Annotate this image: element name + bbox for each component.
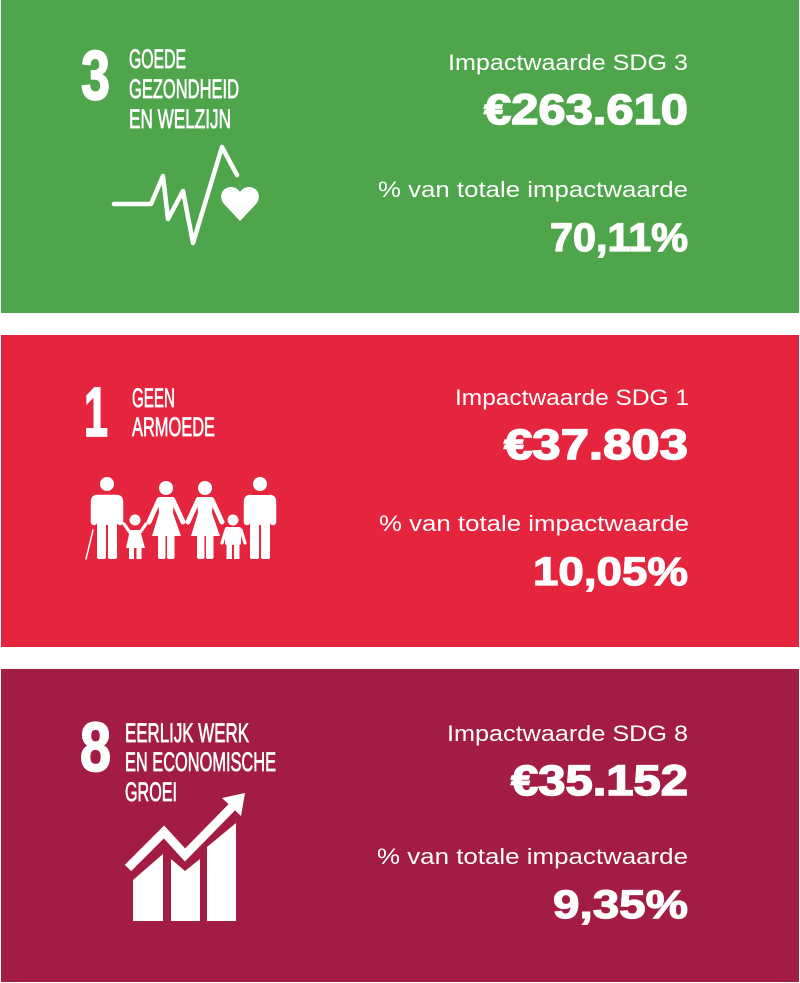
SDG 3 title — [129, 44, 239, 134]
child girl — [124, 514, 146, 559]
man — [247, 477, 273, 559]
child boy — [222, 514, 245, 559]
SDG 1 number: 1 — [84, 373, 108, 451]
label: percentage SDG 1: % van totale impactwaarde — [379, 511, 689, 536]
value: impactwaarde SDG 3: €263.610 — [484, 86, 688, 134]
man with cane — [86, 477, 120, 559]
SDG 1 title: ARMOEDE — [132, 412, 215, 442]
panel: SDG 3 — [1, 0, 799, 313]
icon: family — [86, 477, 273, 559]
SDG 3 title: GOEDE — [129, 44, 186, 74]
label: impactwaarde SDG 1: Impactwaarde SDG 1 — [455, 385, 689, 410]
woman — [149, 481, 183, 559]
panel: SDG 1 — [1, 335, 799, 647]
label: impactwaarde SDG 3: Impactwaarde SDG 3 — [448, 50, 688, 75]
value: impactwaarde SDG 1: €37.803 — [504, 421, 688, 469]
SDG 3 title: GEZONDHEID — [129, 74, 239, 104]
SDG 8 title: EERLIJK WERK — [125, 718, 249, 748]
label: percentage SDG 8: % van totale impactwaarde — [377, 844, 688, 869]
icon: growth chart — [128, 793, 245, 921]
label: percentage SDG 3: % van totale impactwaarde — [378, 177, 688, 202]
value: percentage SDG 8: 9,35% — [553, 883, 688, 927]
icon: heartbeat and heart — [114, 147, 259, 243]
SDG 8 title: GROEI — [125, 777, 177, 807]
panel: SDG 8 — [1, 669, 799, 982]
value: percentage SDG 3: 70,11% — [550, 216, 688, 260]
SDG 3 title: EN WELZIJN — [129, 104, 231, 134]
SDG 8 number: 8 — [80, 708, 111, 786]
SDG 1 title: GEEN — [132, 383, 175, 413]
label: impactwaarde SDG 8: Impactwaarde SDG 8 — [447, 721, 688, 746]
value: percentage SDG 1: 10,05% — [533, 550, 688, 594]
SDG 1 title — [132, 383, 215, 442]
value: impactwaarde SDG 8: €35.152 — [511, 757, 688, 805]
SDG 8 title: EN ECONOMISCHE — [125, 747, 276, 777]
woman — [188, 481, 222, 559]
SDG 3 number: 3 — [81, 36, 110, 114]
SDG 8 title — [125, 718, 276, 807]
